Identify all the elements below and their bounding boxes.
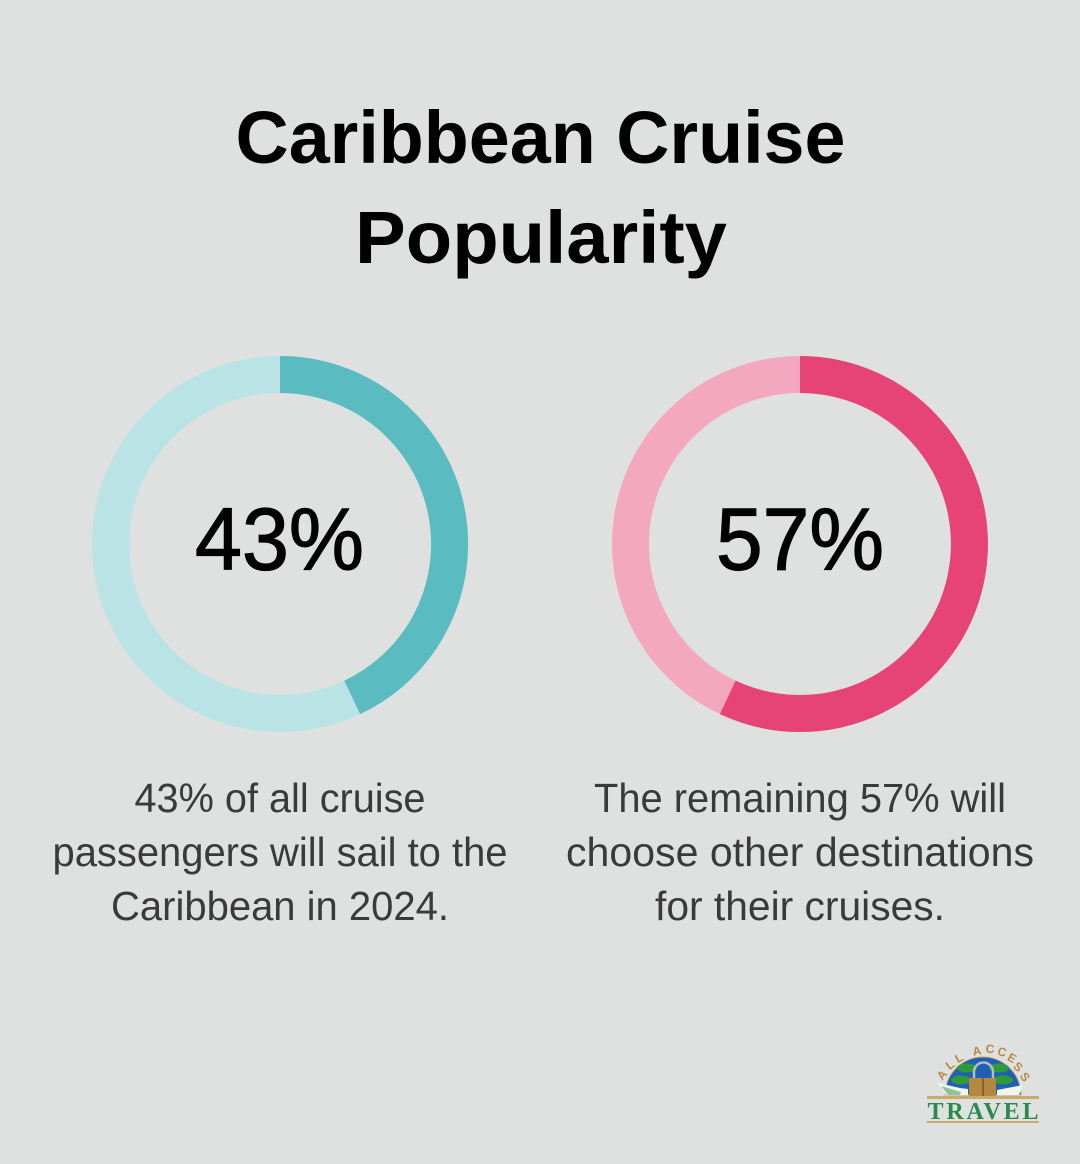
caption: 57%: The remaining 57% will: [594, 775, 1006, 821]
logo arc lettering: L: [943, 1057, 957, 1073]
logo arc lettering: A: [972, 1043, 983, 1059]
logo arc lettering: L: [952, 1050, 966, 1066]
caption: 43%: passengers will sail to the: [52, 829, 508, 875]
title: Caribbean Cruise: [236, 96, 846, 179]
logo: All Access Travel: [927, 1042, 1039, 1125]
logo rules: [927, 1096, 1039, 1099]
value: 57%: 57%: [716, 490, 884, 588]
logo arc lettering: S: [1017, 1070, 1033, 1084]
caption: 57%: for their cruises.: [655, 883, 945, 929]
donut chart: 43%: [110, 374, 450, 714]
caption: 57%: [566, 775, 1034, 929]
value: 43%: 43%: [195, 490, 364, 588]
title: Popularity: [355, 196, 727, 279]
logo ships: [938, 1083, 1023, 1095]
logo palms: [951, 1064, 1013, 1084]
logo arc lettering: A: [934, 1067, 950, 1083]
caption: 43%: [52, 775, 508, 929]
logo padlock: [974, 1062, 993, 1079]
logo arc lettering: C: [996, 1044, 1008, 1060]
logo arc lettering: E: [1005, 1050, 1019, 1066]
logo arc lettering: C: [985, 1042, 995, 1056]
caption: 43%: Caribbean in 2024.: [111, 883, 449, 929]
title: [236, 96, 846, 279]
caption: 57%: choose other destinations: [566, 829, 1034, 875]
caption: 43%: 43% of all cruise: [134, 775, 426, 821]
logo wordmark: TRAVEL: [928, 1099, 1038, 1125]
logo arc lettering: S: [1010, 1059, 1026, 1075]
logo globe: [945, 1057, 1021, 1095]
logo arc lettering: [934, 1042, 1033, 1084]
donut chart: 57%: [630, 374, 970, 714]
